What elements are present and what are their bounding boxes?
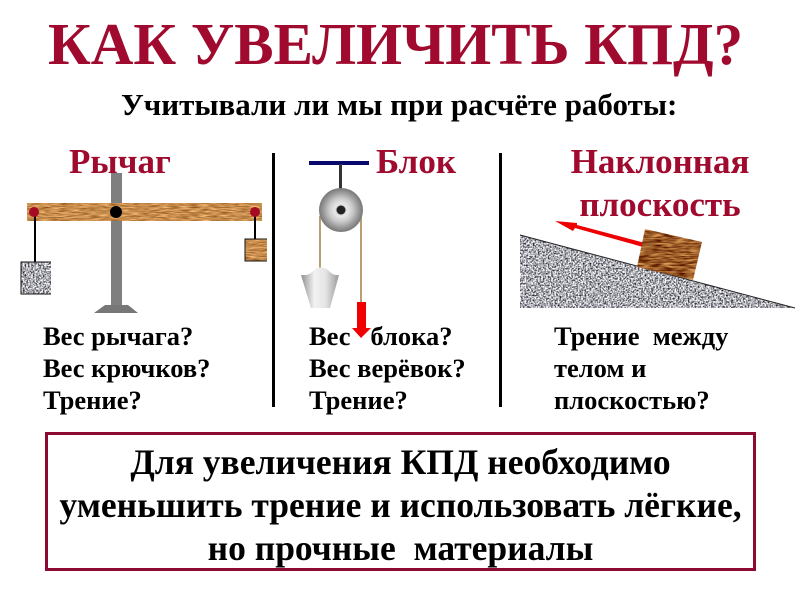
pulley wheel: [319, 188, 363, 232]
pulley questions: Вес верёвок?: [309, 353, 466, 383]
incline plane: [520, 235, 795, 308]
incline questions: [554, 321, 728, 415]
pulley illustration: [301, 161, 371, 338]
pulley load: [301, 268, 339, 308]
lever beam: [27, 203, 262, 221]
right wooden weight: [245, 239, 267, 261]
label: inclined plane: Наклонная плоскость: [571, 142, 749, 224]
subtitle question: Учитывали ли мы при расчёте работы:: [121, 87, 677, 122]
incline illustration: [520, 221, 795, 308]
red friction arrow: [555, 221, 645, 247]
divider left: [272, 153, 275, 407]
pulley questions: [309, 321, 466, 415]
conclusion text: Для увеличения КПД необходимо: [130, 442, 671, 482]
lever questions: Вес рычага?: [43, 321, 193, 351]
pulley ropes: [320, 216, 361, 303]
lever questions: Трение?: [43, 385, 142, 415]
lever pivot: [110, 206, 122, 218]
lever questions: Вес крючков?: [43, 353, 210, 383]
divider right: [499, 153, 502, 407]
pulley questions: Вес блока?: [309, 321, 452, 351]
lever illustration: [21, 173, 267, 313]
lever hooks: [29, 207, 260, 262]
conclusion text: [59, 442, 742, 568]
conclusion text: уменьшить трение и использовать лёгкие,: [59, 485, 742, 525]
pulley questions: Трение?: [309, 385, 408, 415]
title: КАК УВЕЛИЧИТЬ КПД?: [48, 11, 743, 77]
lever questions: [43, 321, 210, 415]
incline questions: Трение между: [554, 321, 728, 351]
conclusion text: но прочные материалы: [208, 528, 593, 568]
incline questions: плоскостью?: [554, 385, 710, 415]
label: pulley: Блок: [376, 142, 456, 181]
red force arrow: [352, 302, 371, 338]
label: lever: Рычаг: [69, 142, 171, 181]
lever stand: [94, 173, 138, 313]
pulley mount: [309, 161, 369, 190]
wooden block: [637, 229, 702, 280]
conclusion box: [45, 432, 756, 571]
left stone weight: [21, 262, 51, 294]
incline questions: телом и: [554, 353, 646, 383]
